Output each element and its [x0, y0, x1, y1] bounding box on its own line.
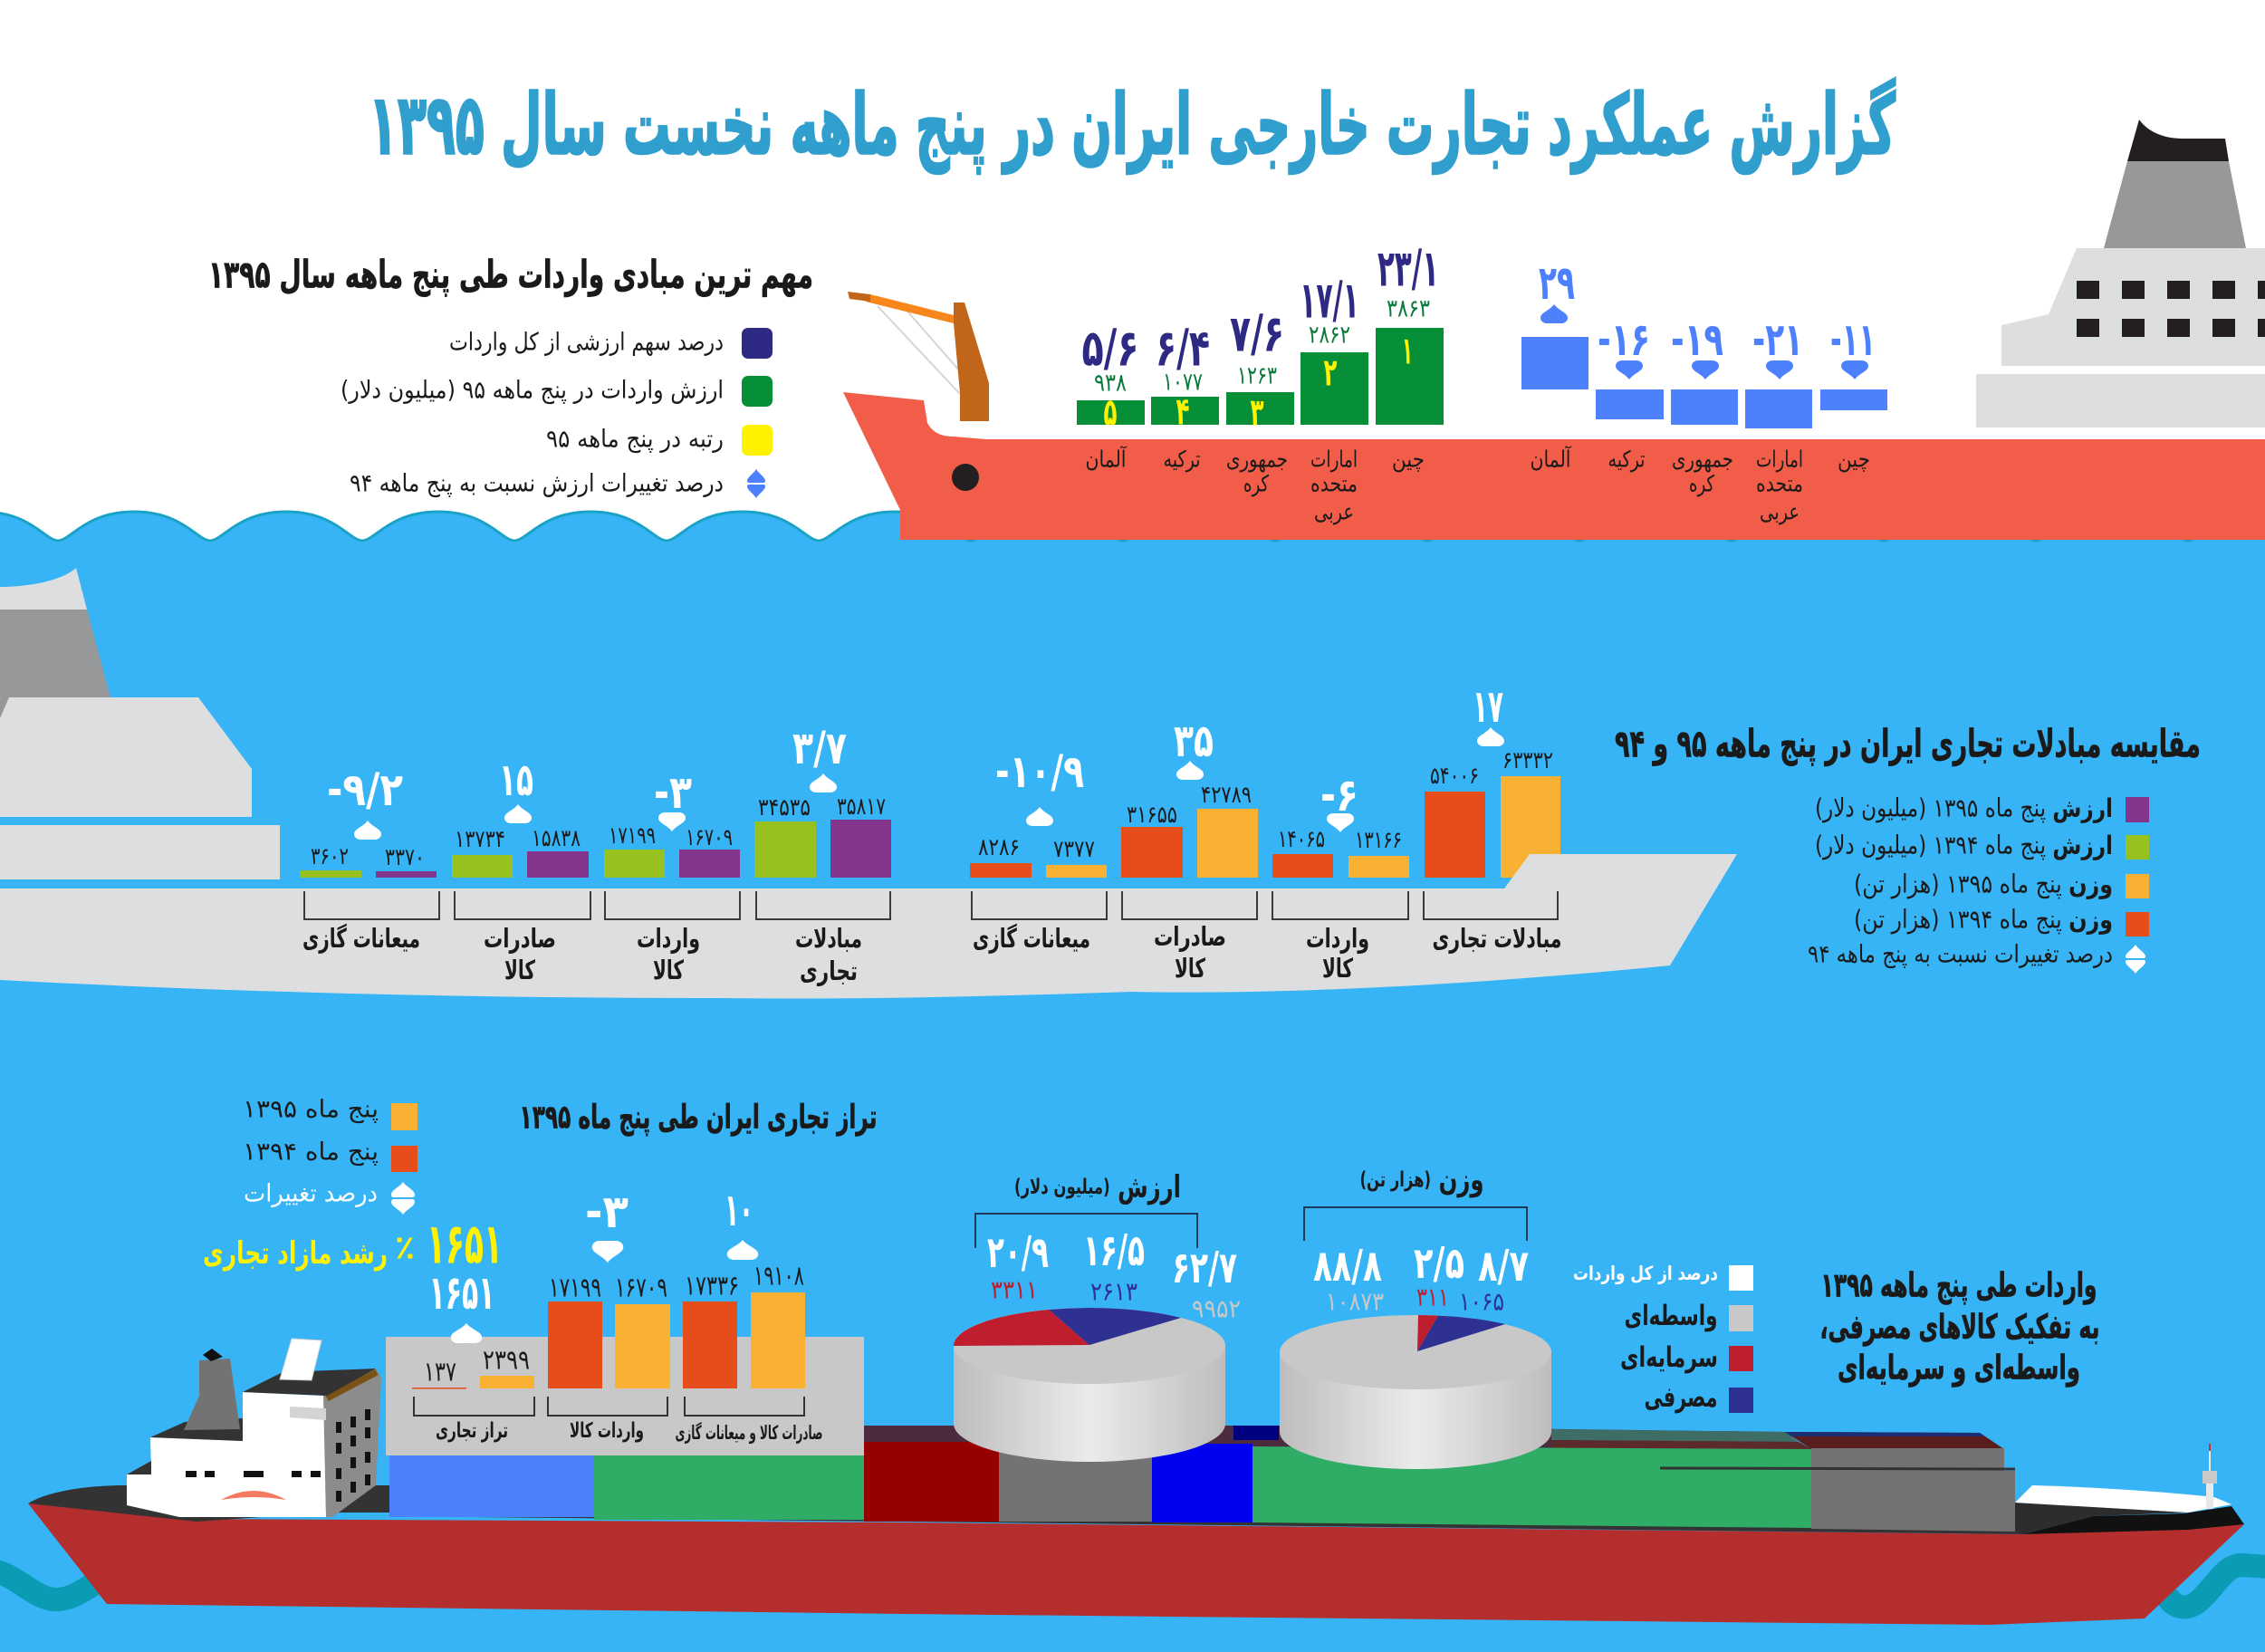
values: ۲۶۱۳ [1090, 1277, 1137, 1306]
category labels: صادرات کالا و میعانات گازی [676, 1421, 822, 1444]
lower deck [0, 825, 280, 879]
legend text: درصد از کل واردات [1573, 1263, 1718, 1284]
country labels: عربی [1314, 498, 1354, 525]
superstructure: side facade [323, 1369, 381, 1517]
values: ۹۹۵۲ [1192, 1293, 1241, 1324]
container: dark red [864, 1442, 999, 1522]
legend text: واسطه‌ای [1625, 1300, 1717, 1332]
heading: imports breakdown: واسطه‌ای و سرمایه‌ای [1838, 1348, 2080, 1388]
title and bracket: ارزش (میلیون دلار) [1014, 1169, 1181, 1205]
value labels: ۳۶۰۲ [311, 843, 349, 870]
change arrows [1026, 727, 1504, 832]
import values: ۳۸۶۳ [1387, 295, 1430, 322]
bar chart: import change by country [1521, 256, 1887, 525]
legend text: وزن پنج ماه ۱۳۹۵ (هزار تن) [1854, 869, 2113, 898]
percentages: ۸۸/۸ [1313, 1241, 1382, 1292]
percentages: ۲/۵ [1414, 1238, 1464, 1289]
value labels: ۸۲۸۶ [978, 834, 1020, 861]
legend swatch: rank [742, 425, 773, 456]
category labels: مبادلات [795, 923, 862, 954]
change percentages [327, 722, 847, 819]
crane arm end [848, 292, 870, 302]
percentages: ۱۶/۵ [1083, 1225, 1145, 1276]
legend text: rank: رتبه در پنج ماهه ۹۵ [546, 426, 724, 453]
country labels: ترکیه [1163, 446, 1201, 473]
background: sea with waves [0, 512, 2265, 1652]
container: right gray lower [1811, 1471, 2015, 1532]
value labels: ۱۷۱۹۹ [549, 1272, 601, 1304]
rank numbers: ۵ [1103, 389, 1118, 435]
legend text: change: درصد تغییرات [244, 1179, 378, 1208]
bow black edge [2023, 1506, 2244, 1534]
orange lifeboat [221, 1491, 286, 1500]
legend text: درصد تغییرات نسبت به پنج ماهه ۹۴ [1808, 940, 2113, 969]
value labels: ۱۳۷ [424, 1357, 456, 1388]
value labels: ۲۳۹۹ [483, 1344, 530, 1377]
change percentages: ۱۵ [499, 754, 533, 806]
legend text: سرمایه‌ای [1620, 1341, 1718, 1374]
percentages [1313, 1238, 1529, 1292]
category labels: صادرات [1154, 921, 1226, 952]
legend icon: change arrows [2126, 945, 2145, 974]
bars: 1394 value [300, 821, 816, 878]
legend text: وزن پنج ماه ۱۳۹۴ (هزار تن) [1854, 904, 2113, 935]
ship lower deck [1976, 374, 2265, 427]
change values: ۲۹ [1539, 256, 1575, 311]
value labels: ۱۳۱۶۶ [1355, 827, 1402, 854]
legend swatch: value share [742, 328, 773, 359]
brackets [414, 1397, 804, 1416]
category labels: کالا [653, 955, 684, 985]
value labels: ۱۴۰۶۵ [1278, 826, 1325, 853]
value labels: ۳۳۷۰ [385, 844, 425, 871]
illustration: bottom container ship [28, 1339, 2244, 1625]
import values: ۲۸۶۲ [1309, 321, 1350, 350]
country labels [1085, 446, 1425, 525]
country labels: جمهوری [1226, 446, 1288, 473]
country labels: کره [1689, 471, 1714, 496]
superstructure: roofs [127, 1369, 376, 1474]
bars: change [1521, 337, 1887, 428]
value labels: ۱۷۳۳۶ [685, 1270, 739, 1302]
callout: trade surplus growth: رشد مازاد تجاری [203, 1235, 388, 1272]
title and bracket [975, 1169, 1197, 1248]
bars: 1395 [480, 1292, 805, 1388]
panel: pie legend and heading [1573, 1263, 2099, 1414]
change values [1539, 256, 1876, 366]
container: green [594, 1455, 864, 1520]
change percentages [995, 680, 1503, 821]
legend swatch: 1395 [391, 1103, 417, 1130]
bars: import value [1077, 328, 1444, 425]
superstructure: white block [127, 1392, 326, 1517]
bar chart: trade value comparison [300, 722, 891, 878]
country labels: آلمان [1085, 446, 1127, 473]
container: long green [1252, 1446, 1811, 1528]
values: ۱۰۶۵ [1459, 1286, 1504, 1317]
illustration: middle ship hull [0, 854, 1737, 999]
value labels: ۳۵۸۱۷ [837, 793, 886, 821]
bow bulwark [2015, 1485, 2231, 1513]
country labels: چین [1838, 446, 1870, 473]
pie chart: imports by weight [1280, 1162, 1551, 1469]
deck strip [28, 1485, 2023, 1534]
panel: trade comparison legend [1615, 721, 2201, 974]
funnel [0, 610, 110, 725]
bridge windows [186, 1471, 321, 1477]
share percentages: ۷/۶ [1230, 304, 1284, 364]
heading: main import origins: مهم ترین مبادی واردات طی پنج ماهه سال ۱۳۹۵ [208, 252, 813, 297]
brackets and labels: trade categories [302, 891, 1561, 986]
bar chart: import value by country [1077, 239, 1444, 525]
container seam [1660, 1468, 2015, 1469]
funnel [184, 1359, 240, 1430]
share percentages: ۲۳/۱ [1377, 239, 1439, 299]
ship funnel cap [2127, 120, 2229, 161]
bow deck [2015, 1503, 2188, 1534]
category labels: میعانات گازی [973, 923, 1090, 954]
bars: 1394 [412, 1301, 737, 1389]
legend swatch: 1394 [391, 1146, 417, 1172]
legend text: value share: درصد سهم ارزشی از کل واردات [449, 328, 724, 357]
legend text: 1395: پنج ماه ۱۳۹۵ [243, 1096, 379, 1123]
change percentages: ۶- [1320, 769, 1358, 821]
illustration: middle ship superstructure [0, 568, 280, 879]
decorative waves at ship bottom [0, 1565, 2265, 1607]
value labels: ۱۹۱۰۸ [753, 1261, 804, 1292]
category labels [436, 1419, 822, 1444]
change values: ۱۱- [1830, 313, 1876, 366]
legend text: ارزش پنج ماه ۱۳۹۵ (میلیون دلار) [1815, 793, 2113, 822]
container: blue [389, 1455, 594, 1517]
ship funnel [2104, 161, 2246, 248]
category labels: کالا [504, 955, 535, 985]
crane post [954, 303, 989, 421]
bar chart: trade weight comparison [970, 680, 1560, 878]
change percentages [429, 1184, 753, 1321]
category labels: صادرات [484, 923, 556, 954]
country labels: جمهوری [1672, 446, 1733, 473]
cylinder side [954, 1346, 1225, 1462]
legend swatches [1729, 1265, 1753, 1413]
funnel cap [0, 568, 87, 610]
value labels: ۷۳۷۷ [1053, 836, 1095, 863]
top stack layers [864, 1426, 2004, 1449]
value labels: ۱۷۱۹۹ [609, 822, 656, 850]
container: right gray upper [1811, 1448, 2004, 1503]
bow mast [2203, 1444, 2217, 1509]
values: ۱۰۸۷۳ [1326, 1286, 1384, 1317]
category labels: مبادلات تجاری [1433, 923, 1561, 954]
upper deck [0, 697, 252, 817]
callout: trade surplus growth [203, 1210, 503, 1277]
rank numbers: ۳ [1250, 389, 1264, 435]
category labels: تجاری [800, 956, 858, 986]
value labels [424, 1261, 804, 1388]
porthole [952, 464, 979, 491]
change percentages: ۱۶۵۱ [429, 1266, 494, 1321]
change percentages: ۳/۷ [792, 722, 847, 774]
value labels [311, 793, 886, 871]
panel: gray trade balance board [386, 1337, 864, 1455]
cylinder side [1280, 1352, 1551, 1469]
cylinder top [954, 1308, 1225, 1384]
ship hull [843, 392, 2265, 540]
country labels: متحده [1756, 471, 1803, 496]
import values [1094, 295, 1430, 397]
heading: imports breakdown: واردات طی پنج ماهه ۱۳۹۵ [1820, 1266, 2097, 1304]
bar chart: import value by country: ۱ [1402, 328, 1413, 373]
value labels: ۳۱۶۵۵ [1127, 802, 1177, 829]
category labels: تراز تجاری [436, 1419, 508, 1443]
panel: trade balance legend [203, 1096, 877, 1277]
import values: ۱۰۷۷ [1163, 368, 1203, 397]
superstructure: facade windows [336, 1409, 370, 1502]
value labels: ۳۴۵۳۵ [758, 794, 811, 821]
value labels: ۵۴۰۰۶ [1430, 763, 1479, 790]
superstructure: balcony [290, 1407, 326, 1420]
legend text: import value: ارزش واردات در پنج ماهه ۹۵ (میلیون دلار) [341, 377, 724, 404]
callout: trade surplus growth: ٪ [395, 1230, 415, 1266]
share percentages: ۶/۴ [1156, 319, 1210, 379]
change values: ۱۶- [1598, 313, 1650, 366]
legend swatches [2126, 797, 2149, 936]
slice: consumer goods [1049, 1308, 1181, 1345]
country labels: متحده [1310, 471, 1358, 496]
country labels: چین [1392, 446, 1425, 473]
superstructure: window strip [327, 1372, 377, 1398]
import values: ۱۲۶۳ [1237, 362, 1277, 389]
import values: ۹۳۸ [1094, 370, 1127, 397]
radar panel [280, 1339, 322, 1380]
change arrows [1540, 304, 1868, 379]
change percentages: ۳۵ [1174, 715, 1214, 767]
change percentages: ۳- [585, 1186, 629, 1238]
country labels [1531, 446, 1870, 525]
legend icon: change arrows [391, 1182, 415, 1215]
title and bracket: وزن (هزار تن) [1360, 1162, 1483, 1198]
category brackets [304, 891, 1558, 919]
crane arm [866, 294, 954, 323]
heading: imports breakdown [1820, 1266, 2099, 1388]
change values: ۱۹- [1671, 313, 1723, 366]
container: bright blue [1152, 1444, 1252, 1522]
change percentages: ۱۰/۹- [995, 745, 1084, 798]
legend icon: change arrows [747, 469, 765, 498]
slice: capital goods [954, 1310, 1089, 1346]
bar chart: trade balance [412, 1184, 822, 1444]
share percentages [1081, 239, 1439, 379]
category labels: کالا [1175, 953, 1205, 984]
value labels: ۶۳۳۳۲ [1502, 747, 1553, 774]
legend text [1573, 1263, 1718, 1414]
value labels: ۴۲۷۸۹ [1201, 782, 1252, 809]
category labels: واردات [1306, 923, 1369, 954]
percentages: ۸/۷ [1478, 1241, 1529, 1292]
slice: consumer goods [1417, 1316, 1505, 1351]
change percentages: ۱۰ [725, 1184, 753, 1236]
category labels: واردات کالا [570, 1419, 644, 1443]
hull [28, 1503, 2244, 1625]
bars: 1395 value [376, 820, 891, 878]
country labels: عربی [1760, 498, 1800, 525]
rank numbers [1103, 328, 1413, 435]
share percentages: ۱۷/۱ [1300, 272, 1359, 330]
ship windows [2077, 281, 2265, 337]
country labels: کره [1243, 471, 1269, 496]
values [991, 1275, 1241, 1324]
callout: trade surplus growth: ۱۶۵۱ [427, 1210, 503, 1277]
legend text: change: درصد تغییرات ارزش نسبت به پنج ماهه ۹۴ [350, 469, 724, 498]
legend text: مصرفی [1645, 1381, 1717, 1414]
ship upper deck [2001, 248, 2265, 366]
change arrows [354, 773, 837, 840]
category labels: واردات [637, 923, 700, 954]
values: ۳۱۱ [1416, 1282, 1449, 1311]
legend text: 1394: پنج ماه ۱۳۹۴ [243, 1138, 379, 1167]
legend swatch: import value [742, 376, 773, 407]
percentages: ۶۲/۷ [1172, 1243, 1237, 1293]
value labels: ۱۶۷۰۹ [686, 824, 733, 851]
category labels [302, 921, 1561, 986]
heading: trade balance: تراز تجاری ایران طی پنج ماه ۱۳۹۵ [520, 1100, 877, 1136]
percentages: ۲۰/۹ [987, 1227, 1049, 1278]
panel: top import legend [208, 252, 813, 498]
value labels [978, 747, 1553, 863]
title and bracket [1304, 1162, 1527, 1241]
legend text [1808, 793, 2113, 969]
percentages [987, 1225, 1237, 1293]
change percentages: ۱۷ [1473, 680, 1503, 733]
container: gray [999, 1449, 1152, 1522]
change values: ۲۱- [1752, 313, 1803, 366]
slice: capital goods [1417, 1315, 1438, 1351]
country labels: ترکیه [1608, 446, 1646, 473]
value labels: ۱۶۷۰۹ [615, 1272, 667, 1304]
heading: imports breakdown: به تفکیک کالاهای مصرفی، [1820, 1308, 2099, 1346]
country labels: آلمان [1531, 446, 1571, 473]
change percentages: ۹/۲- [327, 764, 403, 816]
category labels: کالا [1322, 953, 1353, 984]
funnel cap [203, 1349, 223, 1361]
rank numbers: ۴ [1176, 389, 1190, 433]
legend text: ارزش پنج ماه ۱۳۹۴ (میلیون دلار) [1815, 830, 2113, 860]
values [1326, 1282, 1504, 1317]
pie chart: imports by value [954, 1169, 1241, 1462]
share percentages: ۵/۶ [1081, 319, 1139, 379]
values: ۳۳۱۱ [991, 1275, 1038, 1304]
bars: 1395 weight [1046, 776, 1560, 878]
bars: 1394 weight [970, 792, 1485, 878]
illustration: top ship [843, 120, 2265, 540]
cylinder top [1280, 1315, 1551, 1389]
country labels: امارات [1310, 446, 1358, 473]
value labels: ۱۳۷۳۴ [455, 826, 505, 853]
country labels: امارات [1756, 446, 1803, 473]
change percentages: ۳- [654, 766, 692, 819]
value labels: ۱۵۸۳۸ [532, 825, 581, 852]
crane ropes [878, 306, 960, 394]
rank numbers: ۲ [1324, 350, 1338, 395]
change arrows [451, 1240, 758, 1343]
category labels: میعانات گازی [302, 923, 420, 954]
